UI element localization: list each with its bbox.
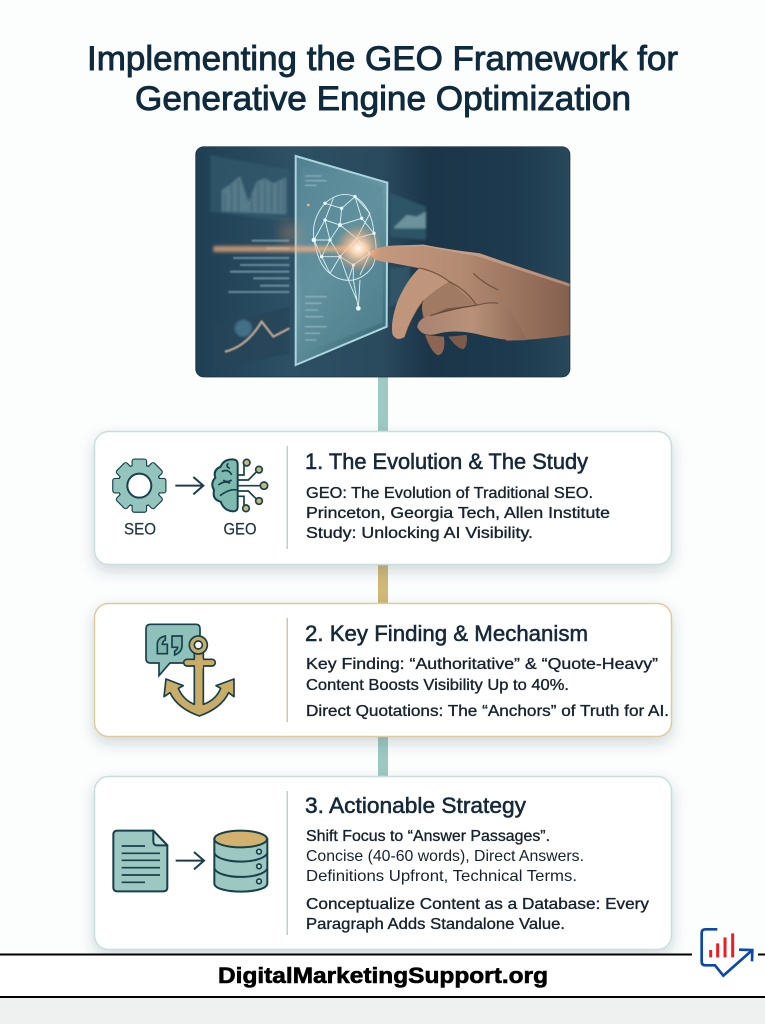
icon: logo chart speech bubble	[702, 929, 752, 976]
finger creases	[405, 268, 498, 337]
icon: SEO gear	[113, 460, 165, 512]
left bottom chart	[224, 308, 290, 354]
title: Generative Engine Optimization	[135, 80, 631, 118]
hero image: hand touching AI brain screen	[196, 147, 570, 377]
text block	[306, 485, 610, 542]
heading: 2. Key Finding & Mechanism	[305, 621, 588, 646]
hand: thumb	[417, 302, 527, 340]
glow at fingertip	[213, 224, 382, 272]
anchor	[164, 636, 234, 716]
right small screen	[390, 193, 426, 307]
label: GEO: GEO	[224, 520, 256, 538]
document	[113, 831, 167, 891]
text block: Conceptualize Content as a Database: Every	[306, 896, 649, 913]
text block: Definitions Upfront, Technical Terms.	[306, 868, 577, 885]
footer site name: DigitalMarketingSupport.org	[218, 963, 548, 988]
text block	[306, 828, 649, 933]
connector: card 2 to card 3	[378, 736, 388, 777]
left top chart	[210, 155, 289, 222]
text block: Key Finding: “Authoritative” & “Quote-Heavy”	[306, 656, 658, 673]
text block: Study: Unlocking AI Visibility.	[306, 525, 533, 542]
panel text lines	[305, 176, 327, 340]
brain network	[313, 194, 376, 308]
hand: index finger and back of hand	[370, 245, 570, 341]
database	[214, 831, 267, 892]
connector: card 1 to card 2	[378, 564, 388, 604]
icon: GEO brain circuit	[212, 459, 268, 512]
heading: 3. Actionable Strategy	[305, 793, 526, 818]
icon: gear to brain	[113, 459, 268, 512]
title: Implementing the GEO Framework for	[87, 40, 678, 78]
text block: Concise (40-60 words), Direct Answers.	[306, 848, 584, 865]
text block: Content Boosts Visibility Up to 40%.	[306, 677, 569, 694]
left text lines	[228, 241, 289, 292]
hand: lower fingers behind	[422, 281, 474, 356]
hand: middle finger	[392, 268, 449, 339]
arrow	[175, 477, 203, 494]
icon: document to database	[113, 831, 267, 892]
label: SEO: SEO	[124, 520, 156, 538]
panel: 2. Key Finding & Mechanism	[94, 604, 672, 736]
text block: GEO: The Evolution of Traditional SEO.	[306, 485, 593, 502]
text block: Paragraph Adds Standalone Value.	[306, 916, 565, 933]
panel: 3. Actionable Strategy	[94, 776, 672, 950]
panel: 1. The Evolution & The Study	[94, 432, 672, 564]
title	[87, 40, 678, 118]
text block: Princeton, Georgia Tech, Allen Institute	[306, 505, 610, 522]
connector: image to card 1	[378, 377, 388, 432]
central glass panel	[296, 156, 387, 365]
footer band	[0, 954, 765, 1024]
icon: quote bubble and anchor	[146, 624, 234, 716]
arrow	[176, 852, 204, 869]
text block: Direct Quotations: The “Anchors” of Truth for AI.	[306, 703, 669, 720]
text block	[306, 656, 669, 720]
speech bubble with quotes	[146, 624, 200, 676]
heading: 1. The Evolution & The Study	[305, 449, 588, 474]
text block: Shift Focus to “Answer Passages”.	[306, 828, 550, 845]
